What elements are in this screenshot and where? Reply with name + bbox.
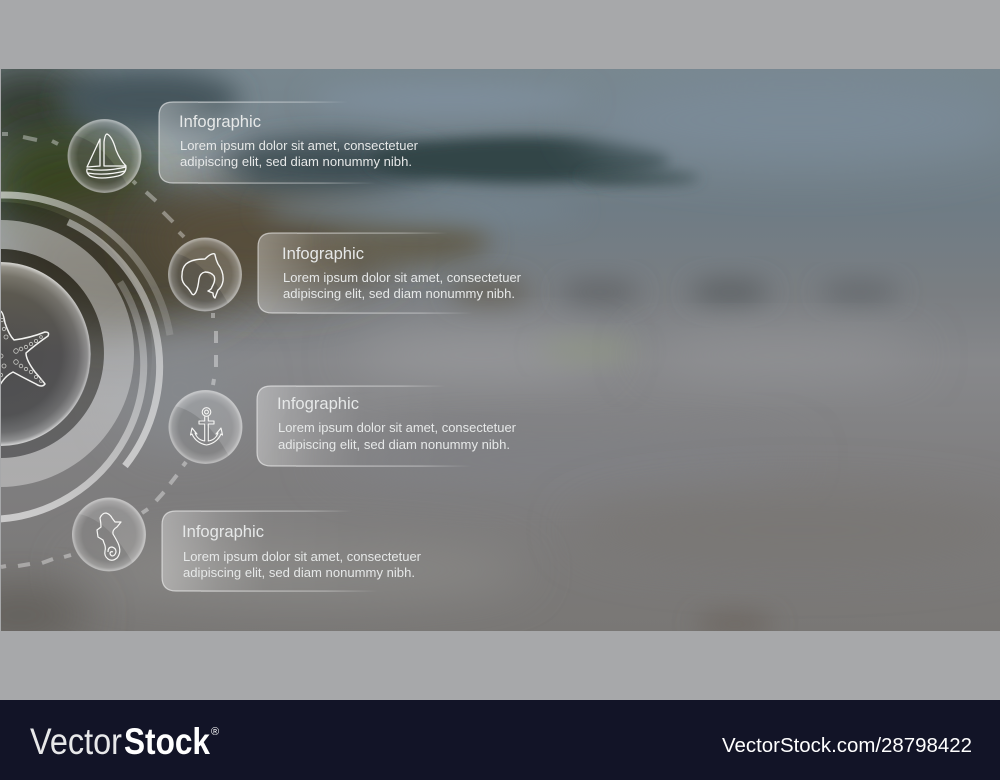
icon: dolphin — [182, 254, 223, 298]
top grey strip — [0, 0, 1000, 69]
text block — [183, 549, 422, 580]
text block: Lorem ipsum dolor sit amet, consectetuer — [183, 549, 422, 564]
image id: VectorStock.com/28798422 — [722, 735, 972, 757]
panel: text card 3 — [257, 386, 517, 467]
icon: seahorse — [97, 513, 121, 560]
outer arc top — [0, 195, 170, 335]
panel: text card 1 — [159, 102, 419, 184]
panel: text card 4 — [162, 510, 422, 592]
dashed orbit ring — [1, 134, 216, 567]
central target rings — [0, 195, 170, 519]
logo: Vector — [30, 721, 122, 762]
text block: adipiscing elit, sed diam nonummy nibh. — [180, 154, 412, 169]
heading: Infographic — [277, 394, 359, 413]
heading: Infographic — [282, 244, 364, 263]
long arc running to left edge — [0, 282, 144, 519]
heading: Infographic — [179, 112, 261, 131]
panel: anchor bubble — [168, 390, 242, 470]
logo: Stock — [124, 721, 210, 762]
panel: seahorse bubble — [72, 498, 146, 576]
panel: dolphin bubble — [168, 238, 242, 318]
icon: anchor — [190, 408, 222, 445]
icon: sailboat — [87, 134, 126, 178]
long arc ending lower right — [68, 222, 160, 466]
text block: adipiscing elit, sed diam nonummy nibh. — [278, 437, 510, 452]
text block — [283, 270, 522, 301]
text block: Lorem ipsum dolor sit amet, consectetuer — [180, 138, 419, 153]
inner disc — [0, 262, 90, 446]
text block: adipiscing elit, sed diam nonummy nibh. — [183, 565, 415, 580]
text block: adipiscing elit, sed diam nonummy nibh. — [283, 286, 515, 301]
icon: starfish — [0, 311, 49, 386]
shaded zone behind rings — [1, 202, 152, 344]
dark ring — [0, 249, 104, 458]
logo: ® — [211, 726, 219, 738]
footer bar — [0, 700, 1000, 780]
text block: Lorem ipsum dolor sit amet, consectetuer — [278, 420, 517, 435]
panel: sailboat bubble — [68, 119, 142, 200]
text block — [180, 138, 419, 169]
text block — [278, 420, 517, 452]
blurred beach photo background — [0, 60, 1000, 641]
text block: Lorem ipsum dolor sit amet, consectetuer — [283, 270, 522, 285]
heading: Infographic — [182, 522, 264, 541]
logo — [30, 721, 219, 762]
panel: text card 2 — [258, 232, 522, 314]
bottom grey strip — [0, 631, 1000, 700]
thick band — [0, 220, 134, 487]
